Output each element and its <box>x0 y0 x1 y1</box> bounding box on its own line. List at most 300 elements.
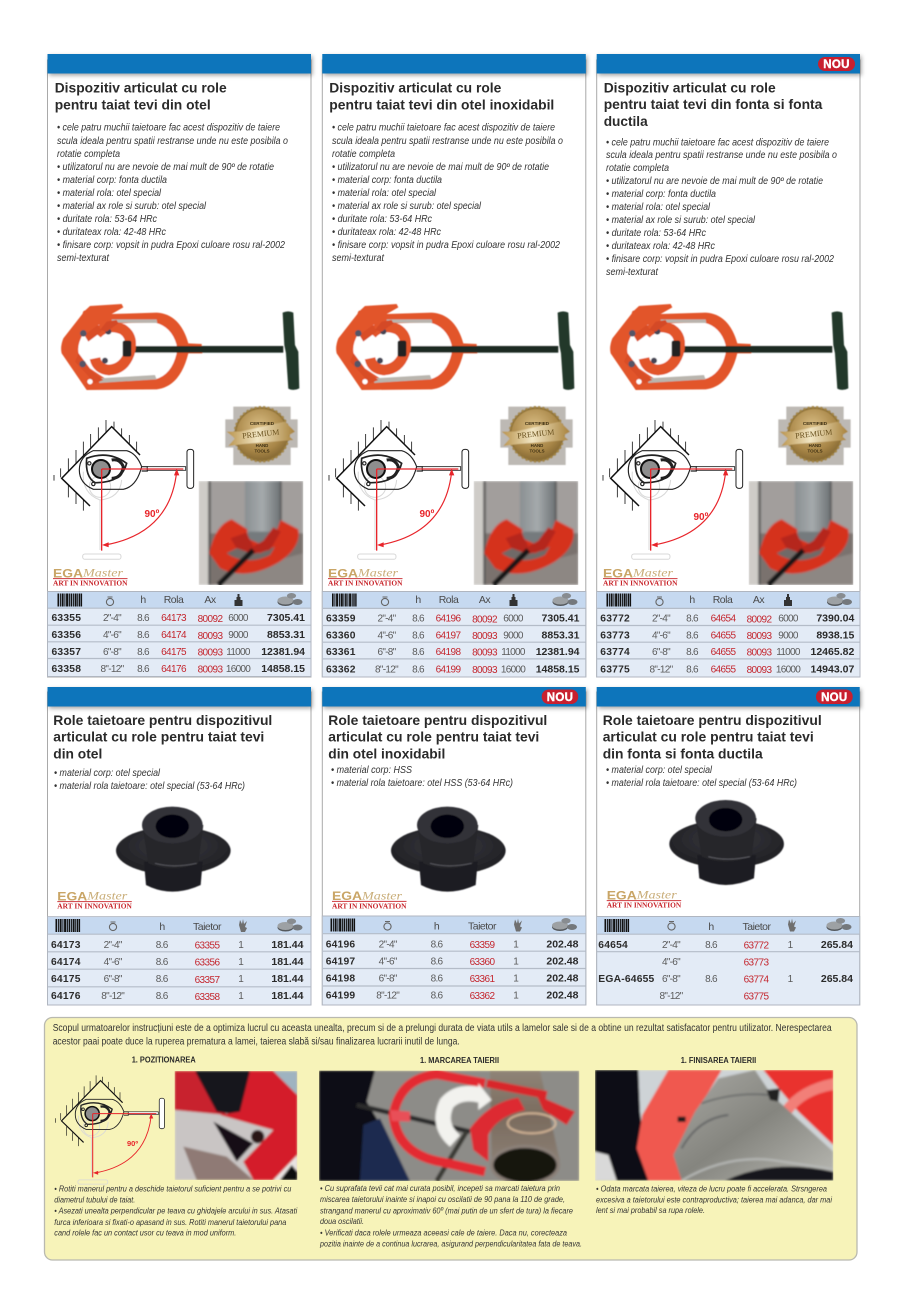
brand logo <box>57 889 132 911</box>
specification table: 8.6 <box>686 630 699 642</box>
specification table: 16000 <box>226 664 251 675</box>
premium badge: PREMIUM <box>517 428 555 440</box>
specification table: 63774 <box>600 647 630 658</box>
introduction text: acestor paai poate duce la ruperea prematura a lamei, taierea slabă si/sau finalizarea lucrarii inutil de lunga. <box>53 1036 460 1047</box>
premium badge: HAND <box>531 443 543 448</box>
feature list: • material corp: fonta ductila <box>606 189 716 200</box>
panel: pipe cutter for cast iron <box>597 54 860 677</box>
feature list: • material rola: otel special <box>332 188 437 199</box>
specification table: 80092 <box>198 614 223 625</box>
positioning instructions: cand rolele fac un contact usor cu teava in mod uniform. <box>54 1228 236 1238</box>
premium badge: TOOLS <box>254 448 270 454</box>
specification table <box>48 592 311 676</box>
heading <box>329 79 554 113</box>
feature list <box>332 122 563 264</box>
premium badge: CERTIFIED <box>803 421 828 426</box>
specification table: 64654 <box>598 940 628 951</box>
feature list: semi-texturat <box>57 253 110 264</box>
small rotation diagram <box>56 1075 164 1184</box>
brand logo <box>328 566 403 588</box>
marking instructions: doua oscilatii. <box>320 1216 364 1226</box>
specification table: 202.48 <box>546 972 579 984</box>
heading <box>53 712 272 761</box>
specification table: 80093 <box>472 631 498 642</box>
specification table: 181.44 <box>271 990 304 1002</box>
panel header bar <box>597 54 860 74</box>
specification table: 64174 <box>161 630 187 641</box>
positioning instructions: • Rotiti manerul pentru a deschide taietorul suficient pentru a se potrivi cu <box>54 1184 291 1194</box>
specification table: Rola <box>164 594 184 606</box>
feature list: scula ideala pentru spatii restranse unde nu este posibila o <box>332 136 563 147</box>
specification table <box>597 916 860 1005</box>
specification table: 64199 <box>326 990 355 1002</box>
feature list: rotatie completa <box>332 149 395 160</box>
specification table: 63356 <box>195 958 220 968</box>
specification table: 80092 <box>747 614 772 626</box>
specification table: 63361 <box>326 647 356 658</box>
roller photo <box>116 807 231 892</box>
specification table: 7390.04 <box>816 612 854 624</box>
heading: articulat cu role pentru taiat tevi <box>53 729 264 745</box>
marking instructions: miscarea taietorului inainte si inapoi cu oscilatii de 90 pana la 110 de grade, <box>320 1194 565 1204</box>
specification table: 63773 <box>600 630 630 642</box>
specification table: 1 <box>238 991 244 1002</box>
specification table: 1 <box>513 956 519 968</box>
feature list: • cele patru muchii taietoare fac acest dispozitiv de taiere <box>57 122 280 134</box>
heading: din otel inoxidabil <box>328 746 445 762</box>
specification table: 202.48 <box>546 956 579 968</box>
heading: Role taietoare pentru dispozitivul <box>603 712 822 728</box>
specification table: 6"-8" <box>379 974 398 984</box>
specification table: 9000 <box>228 630 249 641</box>
tool photo <box>336 304 574 390</box>
specification table: 1 <box>238 974 244 985</box>
specification table: 202.48 <box>546 938 579 950</box>
feature list: • material corp: HSS <box>331 765 412 776</box>
specification table: Taietor <box>193 921 222 933</box>
specification table: 64199 <box>436 664 461 676</box>
specification table: Rola <box>439 594 459 606</box>
specification table: 64176 <box>51 991 81 1002</box>
panel: pipe cutter for stainless steel <box>322 54 586 677</box>
specification table: 8.6 <box>431 956 444 968</box>
specification table: Ax <box>479 594 491 606</box>
specification table: 2"-4" <box>104 940 123 951</box>
specification table: 8.6 <box>705 940 718 951</box>
specification table: 1 <box>788 940 794 951</box>
finishing instructions <box>596 1184 833 1215</box>
feature list: • material corp: otel special <box>606 765 713 776</box>
heading: Dispozitiv articulat cu role <box>55 79 227 95</box>
specification table: 64655 <box>711 630 736 642</box>
specification table: 8"-12" <box>660 991 684 1002</box>
specification table: 1 <box>788 974 794 985</box>
feature list: • material corp: otel special <box>54 768 161 779</box>
specification table: 181.44 <box>271 939 304 951</box>
new badge: NOU <box>547 692 573 704</box>
premium badge: TOOLS <box>807 448 823 454</box>
feature list: • duritate rola: 53-64 HRc <box>606 228 706 239</box>
specification table: 8"-12" <box>101 991 125 1002</box>
specification table: 8853.31 <box>267 629 305 641</box>
premium badge: PREMIUM <box>242 428 280 440</box>
specification table: 64173 <box>161 613 187 624</box>
feature list: • finisare corp: vopsit in pudra Epoxi culoare rosu ral-2002 <box>57 240 285 251</box>
feature list: • duritate rola: 53-64 HRc <box>332 214 432 225</box>
specification table: 14943.07 <box>811 664 854 676</box>
photo: marking the cut <box>319 1071 579 1184</box>
specification table: h <box>415 594 421 606</box>
specification table: 64197 <box>326 956 355 968</box>
specification table: 63356 <box>52 630 81 641</box>
rotation diagram: 90º <box>420 509 435 520</box>
feature list: • duritateax rola: 42-48 HRc <box>57 227 166 238</box>
specification table: 8.6 <box>412 647 425 658</box>
specification table: 80093 <box>198 665 223 676</box>
rotation diagram: 90º <box>694 512 709 523</box>
specification table: h <box>434 920 440 932</box>
photo: positioning close-up <box>175 1071 297 1180</box>
specification table: 64175 <box>51 974 81 985</box>
heading <box>604 79 823 129</box>
specification table: 4"-6" <box>377 630 397 642</box>
feature list: • utilizatorul nu are nevoie de mai mult de 90º de rotatie <box>332 162 549 173</box>
specification table: 80093 <box>747 631 772 642</box>
specification table: 8.6 <box>686 664 699 676</box>
panel: usage instructions <box>44 1018 857 1260</box>
specification table: 63357 <box>52 647 81 658</box>
feature list: • material corp: fonta ductila <box>57 175 167 186</box>
panel header bar <box>597 687 860 706</box>
specification table: 8.6 <box>156 974 169 985</box>
feature list: • material rola taietoare: otel special (53-64 HRc) <box>606 778 797 789</box>
specification table: 6"-8" <box>377 647 397 658</box>
specification table: 63358 <box>195 992 220 1003</box>
heading: pentru taiat tevi din otel inoxidabil <box>329 97 554 113</box>
marking instructions: • Verificati daca rolele urmeaza aceeasi cale de taiere. Daca nu, corecteaza <box>320 1227 567 1237</box>
specification table: 64176 <box>161 664 187 675</box>
specification table: 8.6 <box>431 990 444 1002</box>
specification table: EGA-64655 <box>598 974 655 985</box>
specification table: 6000 <box>228 613 249 624</box>
specification table: 80093 <box>472 648 498 659</box>
marking instructions: strangand manerul cu aproximativ 60º (mai putin de un sfert de tura) la fiecare <box>320 1205 573 1215</box>
rotation diagram <box>329 420 469 559</box>
heading: marking the cut: 1. MARCAREA TAIERII <box>420 1055 499 1065</box>
specification table: Taietor <box>468 920 497 932</box>
specification table: 64655 <box>711 664 736 676</box>
specification table: 8"-12" <box>376 990 400 1002</box>
feature list <box>57 122 288 264</box>
usage photo <box>474 481 578 585</box>
specification table: 8938.15 <box>816 630 854 642</box>
panel header bar <box>48 54 311 74</box>
specification table: 6"-8" <box>103 647 122 658</box>
specification table: 64174 <box>51 957 81 968</box>
panel: cutter rollers for cast iron <box>597 687 860 1005</box>
feature list: • cele patru muchii taietoare fac acest dispozitiv de taiere <box>332 122 555 134</box>
feature list: • duritateax rola: 42-48 HRc <box>332 227 441 238</box>
feature list: • material corp: fonta ductila <box>332 175 442 186</box>
specification table: 64196 <box>326 939 355 950</box>
specification table: 9000 <box>503 630 524 642</box>
feature list <box>606 765 797 789</box>
specification table: 64654 <box>711 614 736 624</box>
rotation diagram: 90º <box>144 509 160 520</box>
specification table: 63772 <box>744 940 769 952</box>
specification table: 63360 <box>326 630 356 642</box>
specification table: 4"-6" <box>652 630 671 642</box>
new badge <box>542 690 578 704</box>
specification table: 4"-6" <box>379 956 398 968</box>
introduction text <box>53 1023 832 1047</box>
usage photo <box>749 481 853 585</box>
heading <box>328 712 547 762</box>
heading: Role taietoare pentru dispozitivul <box>328 712 547 728</box>
specification table: h <box>140 594 146 606</box>
feature list: • duritateax rola: 42-48 HRc <box>606 241 715 252</box>
premium badge <box>500 407 573 465</box>
specification table: 6000 <box>503 614 524 624</box>
specification table: 265.84 <box>821 939 853 951</box>
specification table: 4"-6" <box>104 957 123 968</box>
premium badge: HAND <box>809 443 821 448</box>
new badge: NOU <box>821 692 848 704</box>
specification table: 80093 <box>198 648 223 659</box>
specification table: 64198 <box>326 974 355 984</box>
premium badge: CERTIFIED <box>525 421 550 426</box>
marking instructions: pozitia inainte de a continua lucrarea, asigurand perpendicularitatea fata de teava. <box>319 1239 582 1249</box>
specification table: 64175 <box>161 647 187 658</box>
photo: finishing the cut <box>595 1070 833 1181</box>
specification table: 8.6 <box>686 614 699 624</box>
specification table: h <box>708 921 714 933</box>
feature list: • material rola: otel special <box>57 188 162 199</box>
feature list: • cele patru muchii taietoare fac acest dispozitiv de taiere <box>606 138 829 148</box>
roller photo <box>669 800 784 885</box>
specification table: 63359 <box>470 940 495 951</box>
brand logo <box>332 888 407 910</box>
feature list: semi-texturat <box>332 253 385 264</box>
heading: din otel <box>53 745 102 761</box>
specification table: 80093 <box>747 648 772 659</box>
specification table: 6"-8" <box>104 974 123 985</box>
feature list: • finisare corp: vopsit in pudra Epoxi culoare rosu ral-2002 <box>332 240 560 251</box>
feature list: • material rola: otel special <box>606 202 711 213</box>
specification table: 80093 <box>747 665 772 676</box>
specification table: 2"-4" <box>377 614 397 624</box>
new badge <box>816 690 853 704</box>
heading: articulat cu role pentru taiat tevi <box>328 729 539 745</box>
specification table: 64198 <box>436 647 461 658</box>
brand logo <box>603 566 678 588</box>
specification table: 8.6 <box>137 613 150 624</box>
heading: pentru taiat tevi din fonta si fonta <box>604 96 823 112</box>
feature list: rotatie completa <box>606 163 669 174</box>
specification table: 63355 <box>52 613 81 624</box>
specification table: 63362 <box>326 664 356 676</box>
specification table: 11000 <box>501 647 526 658</box>
specification table: 80093 <box>472 665 498 676</box>
panel header bar <box>322 687 586 706</box>
specification table: 8.6 <box>412 614 425 624</box>
specification table: 14858.15 <box>261 663 305 675</box>
feature list: scula ideala pentru spatii restranse unde nu este posibila o <box>606 150 837 161</box>
specification table: 64196 <box>436 614 461 624</box>
specification table: 8.6 <box>412 630 425 642</box>
specification table: 2"-4" <box>652 614 671 624</box>
heading <box>603 712 822 762</box>
specification table: Taietor <box>742 921 772 933</box>
specification table: 8853.31 <box>542 630 580 642</box>
specification table: Ax <box>753 594 765 606</box>
specification table: 181.44 <box>271 956 304 968</box>
specification table: 63361 <box>470 974 495 985</box>
feature list: • material ax role si surub: otel special <box>332 201 482 212</box>
specification table: 63775 <box>600 664 630 676</box>
specification table: 1 <box>238 940 244 951</box>
positioning instructions: diametrul tubului de taiat. <box>54 1194 135 1204</box>
specification table: 8"-12" <box>101 664 125 675</box>
feature list: • material rola taietoare: otel special (53-64 HRc) <box>54 781 245 792</box>
new badge: NOU <box>823 59 850 71</box>
premium badge: CERTIFIED <box>250 421 275 426</box>
finishing instructions: excesiva a taietorului este contraproductiva; taierea mai adanca, dar mai <box>596 1194 833 1204</box>
specification table: 12381.94 <box>536 646 580 658</box>
specification table: 8.6 <box>431 939 444 950</box>
feature list <box>54 768 245 792</box>
specification table: 4"-6" <box>103 630 122 641</box>
specification table: 64655 <box>711 647 736 658</box>
usage photo <box>199 481 303 585</box>
marking instructions <box>319 1183 582 1249</box>
heading: positioning: 1. POZITIONAREA <box>132 1055 196 1065</box>
panel header bar <box>48 687 311 706</box>
heading: ductila <box>604 113 648 129</box>
specification table: 11000 <box>776 647 801 658</box>
specification table: 63773 <box>744 957 769 968</box>
heading <box>55 79 227 113</box>
positioning instructions: furca inferioara si fixati-o apasand in sus. Rotiti manerul taietorului pana <box>54 1217 286 1227</box>
positioning instructions <box>54 1184 298 1238</box>
feature list: • duritate rola: 53-64 HRc <box>57 214 157 225</box>
specification table: 6"-8" <box>652 647 671 658</box>
specification table: 64197 <box>436 630 461 642</box>
specification table: 8.6 <box>156 940 169 951</box>
roller photo <box>391 807 506 892</box>
small rotation diagram: 90º <box>127 1139 138 1148</box>
specification table <box>48 917 311 1005</box>
premium badge: HAND <box>256 443 268 448</box>
specification table: 8.6 <box>137 647 150 658</box>
heading: din fonta si fonta ductila <box>603 746 763 762</box>
tool photo <box>610 304 848 390</box>
panel header bar <box>322 54 586 74</box>
feature list: • finisare corp: vopsit in pudra Epoxi culoare rosu ral-2002 <box>606 254 834 265</box>
specification table: 63357 <box>195 975 220 986</box>
feature list: semi-texturat <box>606 267 659 278</box>
heading: finishing the cut: 1. FINISAREA TAIERII <box>681 1055 756 1065</box>
specification table: 63772 <box>600 614 630 624</box>
feature list: • material rola taietoare: otel HSS (53-64 HRc) <box>331 778 513 789</box>
premium badge: PREMIUM <box>795 428 833 440</box>
premium badge <box>778 407 851 465</box>
specification table: 2"-4" <box>662 940 681 951</box>
premium badge: TOOLS <box>529 448 545 454</box>
feature list: • utilizatorul nu are nevoie de mai mult de 90º de rotatie <box>57 162 274 173</box>
specification table: 202.48 <box>546 990 579 1002</box>
specification table: 265.84 <box>821 973 853 985</box>
specification table: 8.6 <box>431 974 444 984</box>
marking instructions: • Cu suprafata tevii cat mai curata posibil, incepeti sa marcati taietura prin <box>320 1183 560 1193</box>
specification table: 1 <box>238 957 244 968</box>
specification table: 7305.41 <box>267 612 305 624</box>
specification table: 6"-8" <box>662 974 681 985</box>
specification table: 14858.15 <box>536 664 580 676</box>
specification table: 8.6 <box>686 647 699 658</box>
specification table: 80092 <box>472 614 498 626</box>
specification table: 63775 <box>744 991 769 1002</box>
feature list: scula ideala pentru spatii restranse unde nu este posibila o <box>57 136 288 147</box>
specification table: 1 <box>513 939 519 950</box>
panel: cutter rollers for steel <box>48 687 311 1005</box>
specification table: 2"-4" <box>103 613 122 624</box>
specification table: 63359 <box>326 614 356 624</box>
finishing instructions: lent si mai probabil sa rupa rolele. <box>596 1205 705 1215</box>
specification table: 8.6 <box>156 957 169 968</box>
specification table: h <box>689 594 695 606</box>
specification table: 80093 <box>198 631 223 642</box>
specification table: 6000 <box>778 614 799 624</box>
brand logo <box>607 888 682 910</box>
heading: Dispozitiv articulat cu role <box>604 79 776 95</box>
specification table: 8.6 <box>412 664 425 676</box>
specification table: 8.6 <box>137 630 150 641</box>
panel: cutter rollers for stainless steel <box>322 687 586 1005</box>
specification table: 12381.94 <box>261 646 305 658</box>
specification table: 63774 <box>744 974 769 986</box>
specification table: 8.6 <box>156 991 169 1002</box>
specification table: Ax <box>204 594 217 606</box>
specification table: 7305.41 <box>542 612 580 624</box>
heading: Dispozitiv articulat cu role <box>329 79 502 95</box>
specification table <box>322 916 586 1005</box>
finishing instructions: • Odata marcata taierea, viteza de lucru poate fi accelerata. Strsngerea <box>596 1184 827 1194</box>
specification table: 12465.82 <box>811 646 854 658</box>
specification table: 16000 <box>501 664 526 676</box>
feature list: • utilizatorul nu are nevoie de mai mult de 90º de rotatie <box>606 176 823 187</box>
specification table: 16000 <box>776 664 801 676</box>
specification table: 63355 <box>195 940 220 952</box>
rotation diagram <box>603 420 743 559</box>
specification table: 1 <box>513 974 519 984</box>
positioning instructions: • Asezati unealta perpendicular pe teava cu ghidajele arcului in sus. Atasati <box>54 1205 298 1215</box>
specification table: 11000 <box>226 647 251 658</box>
specification table <box>322 592 586 677</box>
specification table: 181.44 <box>271 973 304 985</box>
specification table: 1 <box>513 990 519 1002</box>
premium badge <box>225 407 298 465</box>
specification table: 64173 <box>51 940 81 951</box>
heading: pentru taiat tevi din otel <box>55 97 211 113</box>
new badge <box>818 57 855 71</box>
specification table: 63362 <box>470 991 495 1002</box>
specification table: 8"-12" <box>650 664 674 676</box>
specification table: 63358 <box>52 664 81 675</box>
feature list <box>606 138 837 278</box>
specification table: 2"-4" <box>379 939 398 950</box>
specification table: h <box>159 921 165 933</box>
